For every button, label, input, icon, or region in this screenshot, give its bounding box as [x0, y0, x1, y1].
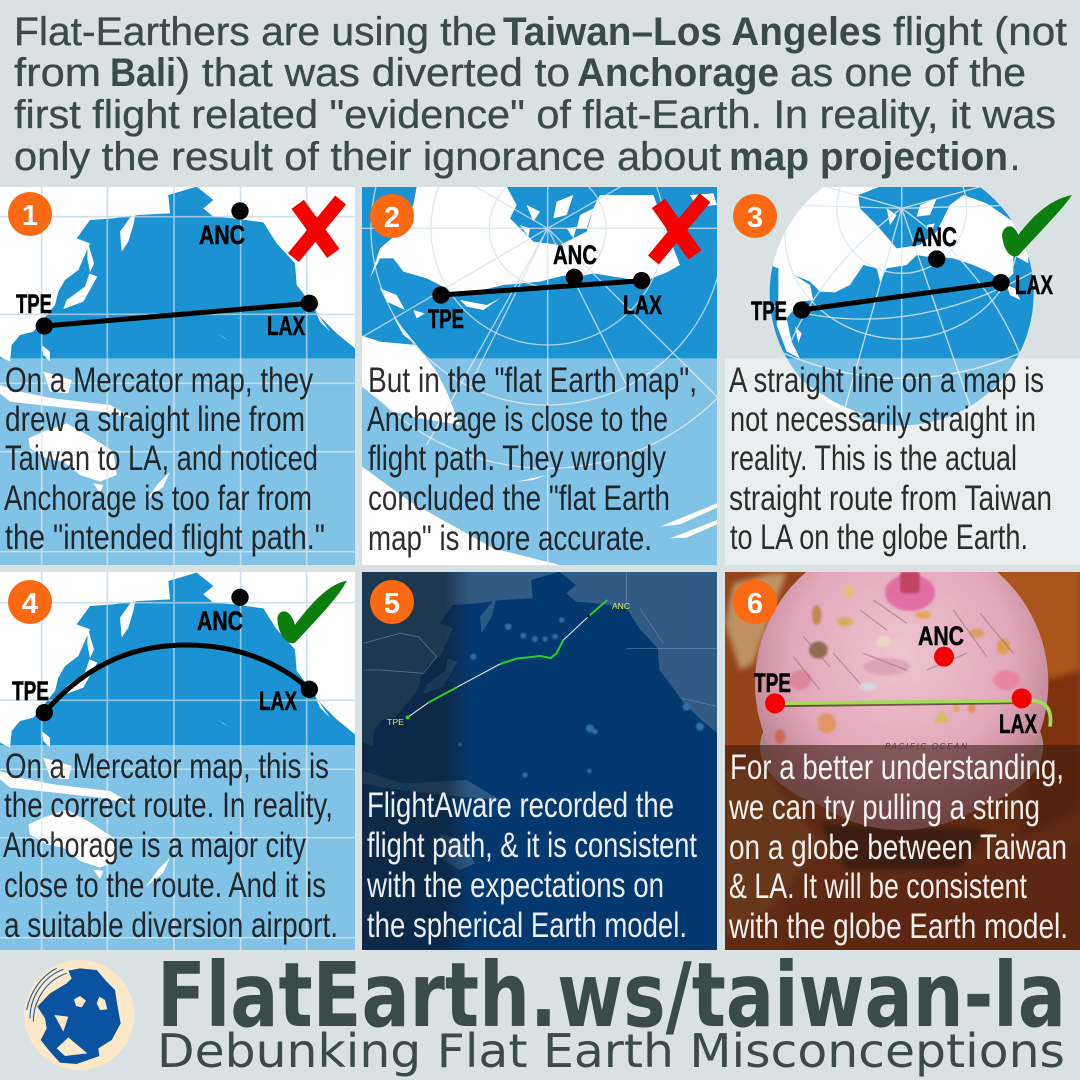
airport labels: ANC [912, 222, 957, 252]
panel 4: Mercator great circle [0, 570, 355, 951]
text block 1: drew a straight line from [5, 400, 305, 439]
panel 2: flat Earth map [308, 0, 788, 565]
airport labels [16, 220, 305, 341]
badge 6: 6 [747, 588, 763, 620]
airport labels: LAX [999, 709, 1037, 739]
airport labels: TPE [387, 718, 404, 727]
badge 3 [733, 194, 777, 238]
title: only the result of their ignorance about [14, 135, 721, 179]
footer logo: flat Earth disc [24, 960, 134, 1070]
airport labels: TPE [16, 289, 52, 319]
badge 5: 5 [384, 588, 400, 620]
text block 2: flight path. They wrongly [368, 439, 666, 478]
airport labels [387, 602, 630, 727]
title [14, 10, 1067, 179]
airport labels: TPE [428, 304, 464, 334]
title: Anchorage [577, 51, 779, 95]
panel 6: string on a globe photo [720, 537, 1080, 950]
text block 5: the spherical Earth model. [367, 906, 687, 945]
title: . [1010, 135, 1020, 179]
text block 4: a suitable diversion airport. [4, 906, 338, 945]
text block 2: concluded the "flat Earth [368, 479, 670, 518]
text block 1: Taiwan to LA, and noticed [5, 439, 318, 478]
text block 5: with the expectations on [366, 866, 664, 905]
badge 6 [733, 580, 777, 624]
footer tagline: Debunking Flat Earth Misconceptions [157, 1024, 1065, 1078]
airport labels: TPE [751, 296, 787, 326]
text block 4: the correct route. In reality, [4, 786, 333, 825]
badge 1: 1 [22, 200, 38, 232]
map: Mercator Pacific [0, 187, 355, 565]
airport labels: LAX [259, 686, 297, 716]
airport labels [754, 621, 1037, 739]
title: flight (not [893, 10, 1067, 54]
title: Flat-Earthers are using the [14, 10, 497, 54]
airport labels: ANC [197, 606, 243, 636]
airport labels: LAX [267, 311, 305, 341]
panel 5: FlightAware track [360, 570, 720, 950]
text block 1: On a Mercator map, they [5, 361, 313, 400]
badge 2 [370, 194, 414, 238]
title: Bali [110, 51, 176, 95]
text block 2: Anchorage is close to the [367, 400, 668, 439]
airport labels: ANC [612, 602, 630, 611]
ocean caption on globe: PACIFIC OCEAN [885, 742, 967, 751]
map: FlightAware dark map [362, 572, 717, 950]
text block 5 [366, 786, 697, 945]
map: Mercator Pacific with curved route [0, 572, 355, 950]
title: Taiwan–Los Angeles [503, 10, 882, 54]
map: azimuthal equidistant [362, 187, 717, 565]
text block 5: flight path, & it is consistent [367, 826, 697, 865]
title: as one of the [790, 51, 1026, 95]
airport labels: LAX [1015, 270, 1053, 300]
text block 3 [729, 361, 1052, 557]
text block 1: the "intended flight path." [5, 518, 325, 557]
text block 5: FlightAware recorded the [367, 786, 674, 825]
map: globe [725, 187, 1080, 565]
airport labels: ANC [918, 621, 964, 651]
text block 6 [728, 748, 1068, 946]
airport labels: TPE [12, 676, 49, 706]
title: first flight related "evidence" of flat-Earth. In reality, it was [14, 93, 1056, 137]
badge 5 [370, 580, 414, 624]
airport labels [428, 240, 662, 334]
text block 1 [4, 361, 325, 557]
photo: pink globe with string [725, 572, 1080, 950]
badge 4: 4 [22, 588, 38, 620]
airport labels: TPE [754, 668, 791, 698]
title: from [14, 51, 101, 95]
airport labels [12, 606, 297, 716]
text block 2 [367, 361, 697, 558]
airport labels: ANC [199, 220, 245, 250]
airport labels: LAX [623, 290, 662, 320]
text block 2: But in the "flat Earth map", [368, 361, 697, 400]
airport labels: ANC [553, 240, 597, 270]
text block 1: Anchorage is too far from [4, 479, 312, 518]
badge 3: 3 [747, 202, 763, 234]
text block 4 [3, 747, 338, 945]
badge 4 [8, 580, 52, 624]
text block 2: map" is more accurate. [368, 519, 652, 558]
panel 3: globe route [725, 187, 1080, 565]
title: ) that was diverted to [176, 51, 570, 95]
title: map projection [729, 135, 1008, 179]
text block 4: close to the route. And it is [4, 866, 326, 905]
panel 1: Mercator straight line [0, 185, 355, 565]
badge 2: 2 [384, 202, 400, 234]
airport labels [751, 222, 1053, 326]
text block 4: On a Mercator map, this is [5, 747, 329, 786]
badge 1 [8, 192, 52, 236]
text block 4: Anchorage is a major city [3, 826, 306, 865]
